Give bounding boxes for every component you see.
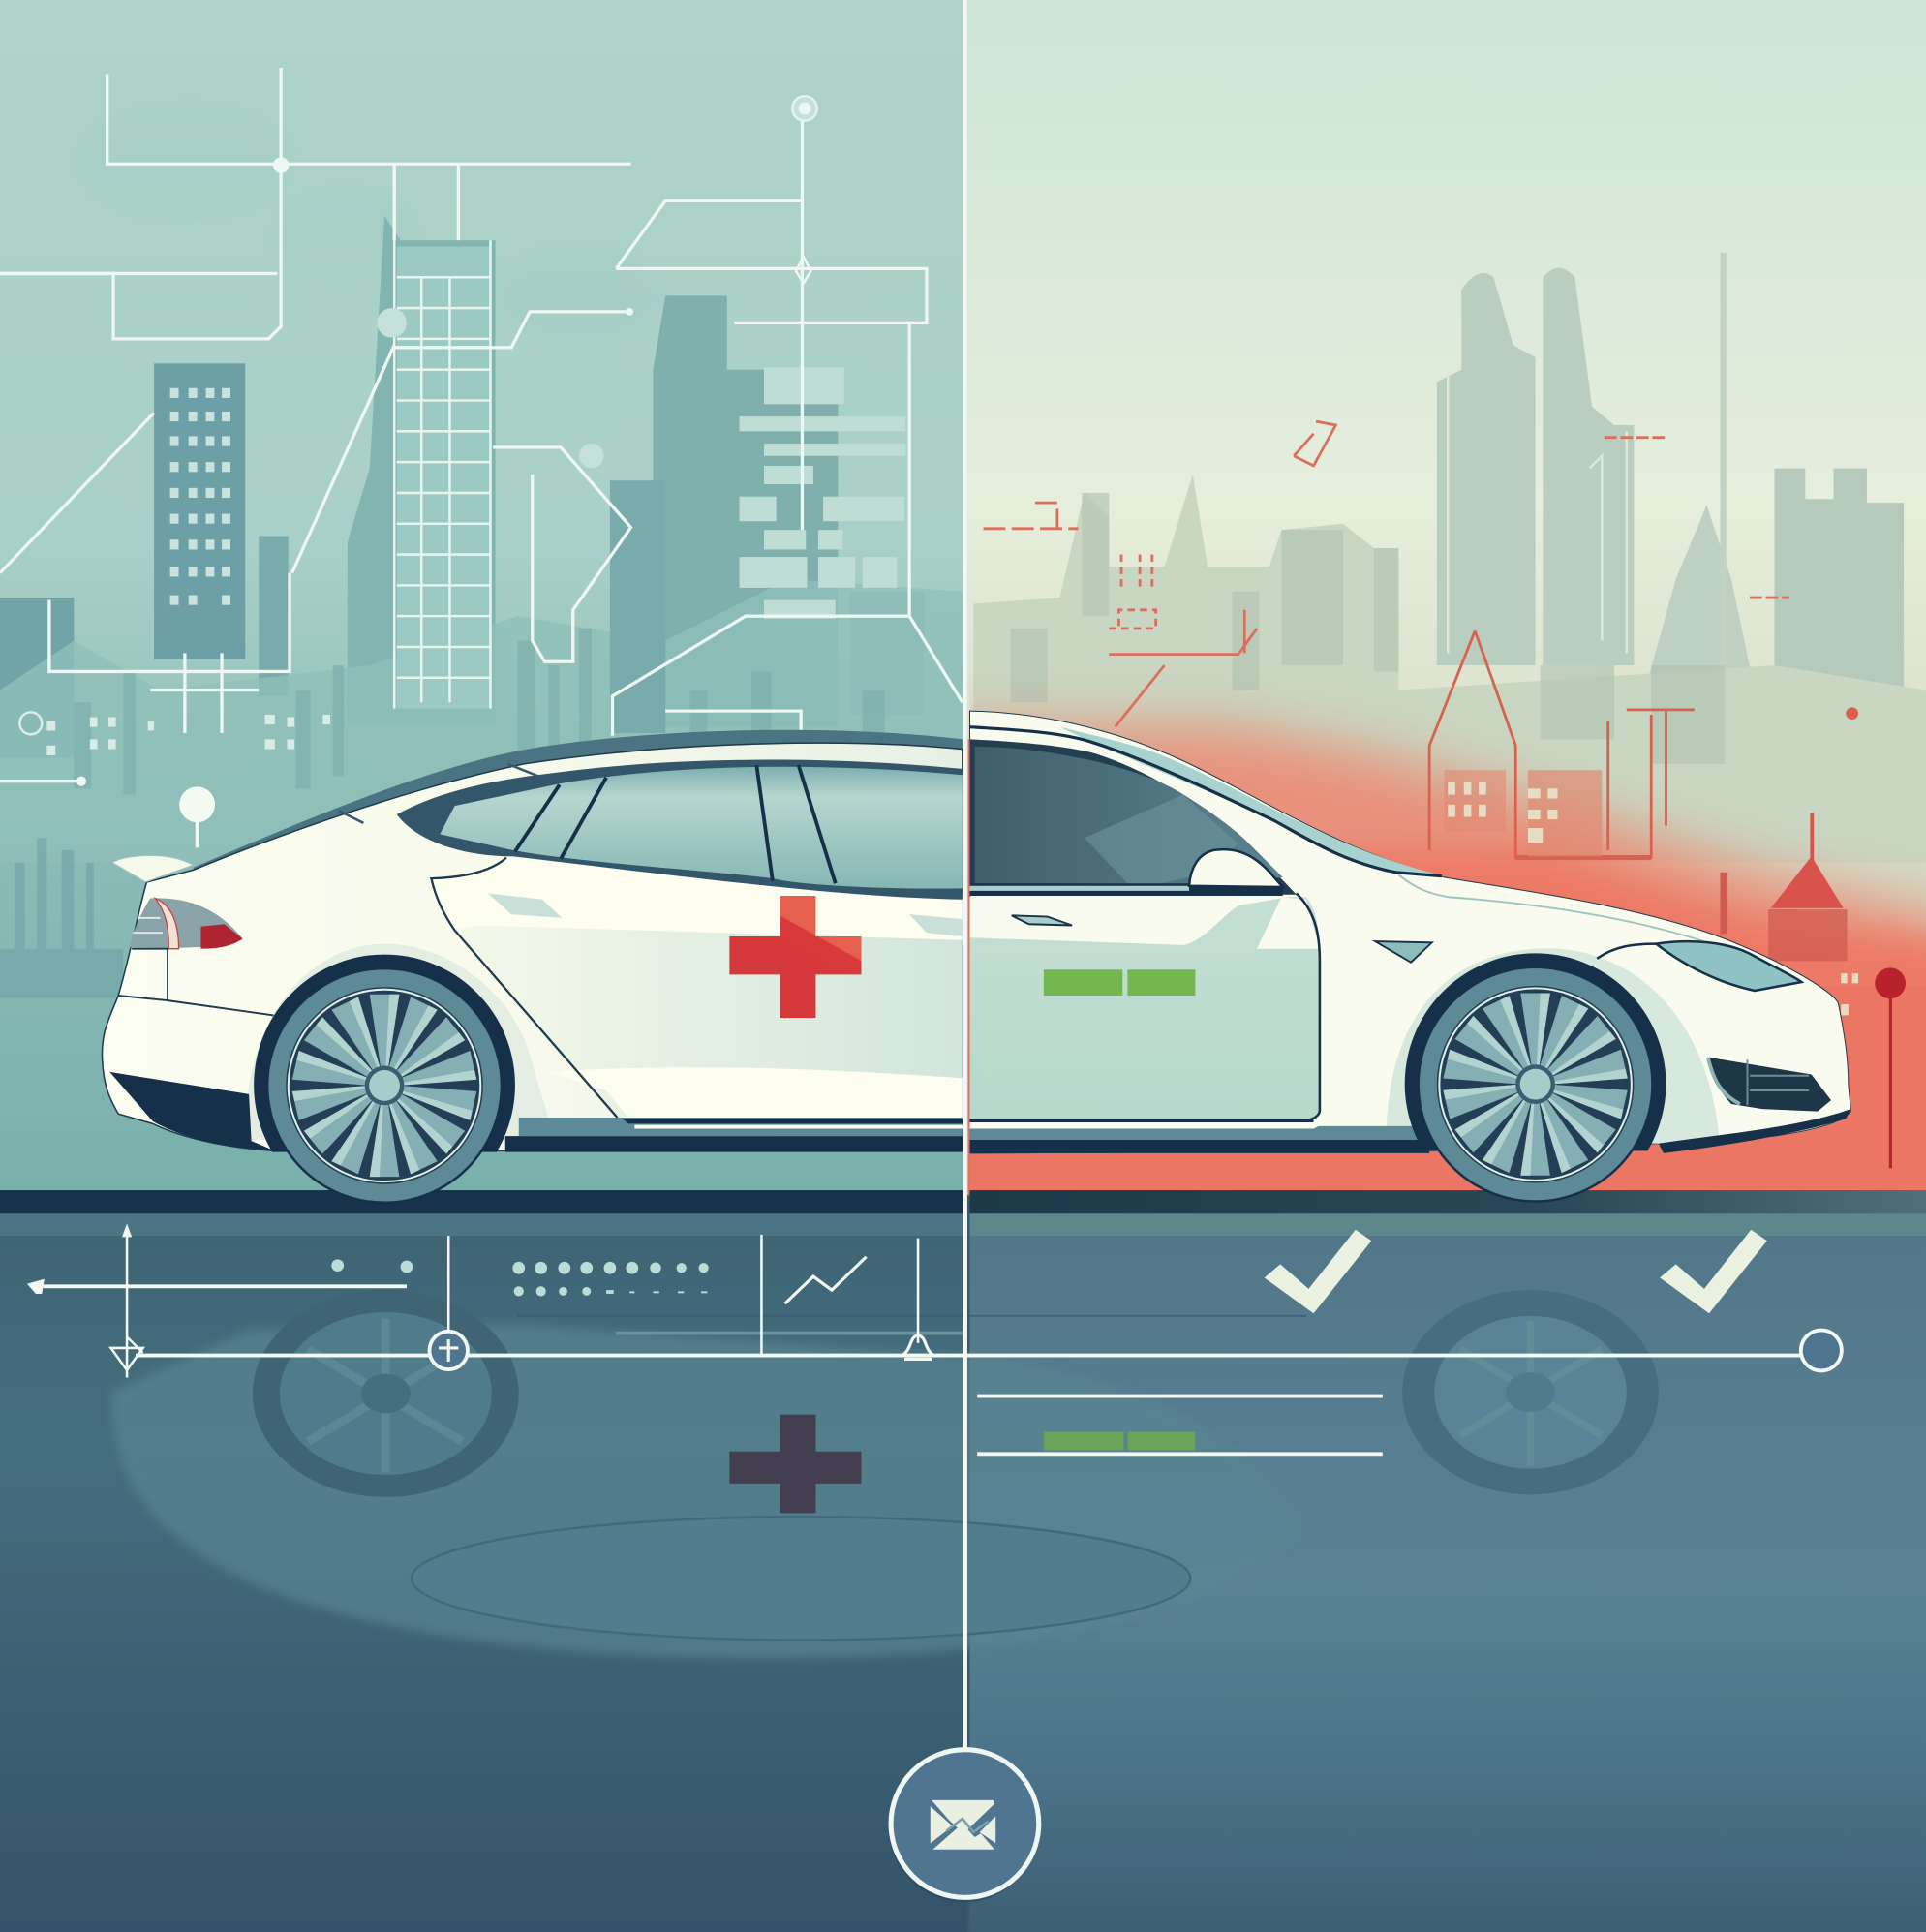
rear lower bumper bbox=[109, 1072, 275, 1150]
window reflection bbox=[1085, 795, 1238, 890]
windshield teal band bbox=[1059, 727, 1444, 876]
headlight bbox=[1597, 941, 1801, 991]
hood crease bbox=[1398, 874, 1726, 949]
door highlight bbox=[548, 1067, 963, 1118]
right cityscape silhouettes bbox=[973, 253, 1926, 863]
icon: envelope bbox=[931, 1800, 995, 1850]
bell node bbox=[902, 1335, 934, 1359]
right red pin bbox=[1875, 967, 1906, 1168]
car: right half front bbox=[969, 711, 1850, 1203]
floor timeline lines bbox=[44, 1232, 1801, 1454]
dot rows bbox=[331, 1259, 709, 1296]
check mark two bbox=[1660, 1230, 1767, 1313]
road dark band left bbox=[0, 1190, 967, 1217]
front wheel bbox=[1405, 953, 1666, 1203]
end ring node bbox=[1801, 1330, 1842, 1370]
spoiler bbox=[112, 855, 194, 882]
door panel lower bbox=[969, 897, 1320, 1120]
fender vent bbox=[1375, 941, 1432, 963]
door line bbox=[431, 858, 618, 1118]
green badge left bbox=[1044, 969, 1122, 996]
check mark one bbox=[1265, 1230, 1371, 1313]
right red tower and building bbox=[1444, 707, 1858, 1015]
left circuit line network bbox=[0, 68, 963, 782]
window pillars bbox=[515, 765, 836, 883]
window glass bbox=[440, 767, 963, 889]
road band right bbox=[969, 1190, 1926, 1236]
reflected green bars bbox=[1044, 1431, 1195, 1451]
right red construction lines bbox=[983, 421, 1789, 858]
road lighter band left bbox=[0, 1213, 967, 1236]
car: left half rear bbox=[102, 730, 963, 1204]
door upper cream band bbox=[431, 858, 963, 940]
panel: right floor reflection area bbox=[969, 1236, 1926, 1932]
salmon seam bbox=[968, 739, 969, 1195]
rear wheel bbox=[254, 955, 515, 1204]
side mirror bbox=[1189, 849, 1283, 887]
panel: right pale green and salmon background bbox=[967, 0, 1926, 1195]
car reflection bbox=[111, 1290, 1659, 1658]
panel gleam marks bbox=[488, 893, 963, 936]
wheel arch halo bbox=[1387, 948, 1719, 1144]
rear quarter line bbox=[118, 949, 274, 1015]
door handle bbox=[1012, 915, 1072, 926]
tail light bbox=[130, 898, 243, 949]
circuit nodes and pin bbox=[19, 96, 817, 847]
window frame bbox=[397, 760, 963, 900]
front grille bbox=[1708, 1058, 1831, 1112]
circular envelope badge bbox=[889, 1750, 1039, 1902]
door line bbox=[969, 893, 1320, 1120]
left cityscape bbox=[0, 99, 963, 998]
roof dark edge line bbox=[969, 727, 1442, 876]
red cross bbox=[729, 896, 862, 1018]
window glass bbox=[975, 747, 1283, 887]
central vertical divider line bbox=[963, 0, 967, 1752]
door highlight bbox=[969, 897, 1320, 949]
side sill bbox=[519, 1118, 963, 1136]
window frame bbox=[969, 739, 1297, 895]
window bottom trim bbox=[969, 883, 1283, 896]
front lower lip bbox=[1659, 1109, 1850, 1153]
panel: left teal sky background bbox=[0, 0, 964, 1195]
plus node bbox=[429, 1332, 468, 1369]
rear body shell bbox=[102, 743, 963, 1150]
roof teal band bbox=[194, 730, 963, 873]
green badge right bbox=[1127, 969, 1195, 996]
door panel bbox=[431, 858, 963, 1118]
small arrow marks bbox=[27, 1223, 132, 1294]
reflected cross bbox=[729, 1415, 862, 1513]
side sill bbox=[969, 1126, 1417, 1140]
front body shell bbox=[969, 711, 1850, 1153]
panel: left floor reflection area bbox=[0, 1236, 967, 1932]
rear wheel arch halo bbox=[246, 944, 548, 1140]
right haze and salmon gradient bbox=[949, 727, 1926, 1220]
roof seam lines bbox=[339, 764, 544, 823]
